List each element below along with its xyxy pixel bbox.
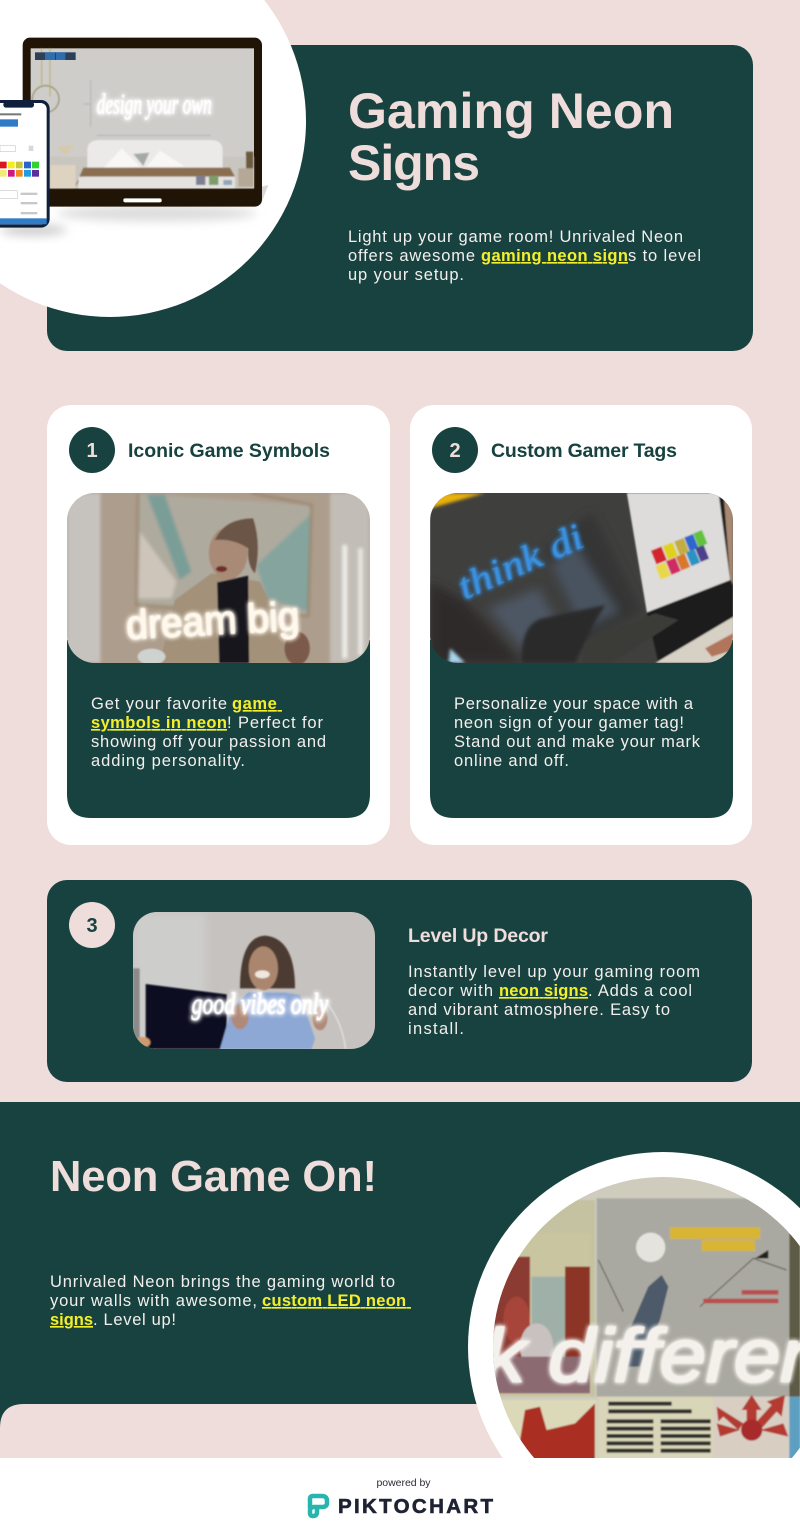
text block: level up decor: install.	[408, 1020, 464, 1038]
panel: header	[0, 0, 753, 351]
heading: Iconic Game Symbols: Iconic Game Symbols	[128, 440, 330, 462]
text block: card 1: game	[232, 695, 282, 713]
text block: footer: signs	[50, 1311, 93, 1329]
heading: title	[348, 83, 674, 191]
text block: header intro: up your setup.	[348, 266, 464, 284]
text block: card 1: Get your favorite	[91, 695, 227, 713]
badge: number 3: 3	[86, 915, 98, 937]
text block: header intro: gaming neon sign	[481, 247, 628, 265]
heading: title: Gaming Neon	[348, 83, 674, 139]
badge: number 2	[432, 427, 478, 473]
text block: card 2: neon sign of your gamer tag!	[454, 714, 684, 732]
pink strip at band bottom	[0, 1404, 800, 1458]
text block: level up decor: and vibrant atmosphere. Easy to	[408, 1001, 670, 1019]
text block: footer: . Level up!	[93, 1311, 176, 1329]
heading: Neon Game On!: Neon Game On!	[50, 1153, 377, 1201]
text block: level up decor	[408, 963, 700, 1038]
icon: Piktochart mark	[310, 1496, 327, 1516]
text block: header intro: s to level	[628, 247, 701, 265]
text block: level up decor: decor with	[408, 982, 493, 1000]
text block: card 1: symbols in neon	[91, 714, 227, 732]
phone	[0, 100, 50, 228]
image: laptop screen with blue neon design: think di	[451, 516, 590, 607]
panel: card 1	[47, 405, 390, 845]
badge: number 2: 2	[449, 440, 461, 462]
text block: card 2	[454, 695, 701, 770]
panel: card 2	[410, 405, 752, 845]
logo: Piktochart: PIKTOCHART	[338, 1495, 493, 1518]
text block: footer: Unrivaled Neon brings the gaming world to	[50, 1273, 395, 1291]
text block: card 1	[91, 695, 326, 770]
text block: footer	[50, 1273, 411, 1329]
text block: card 1: adding personality.	[91, 752, 245, 770]
panel: level up decor	[47, 880, 752, 1082]
image: woman holding dream big neon sign: dream big	[125, 593, 300, 648]
image: woman holding good vibes only neon sign: good vibes only	[192, 987, 329, 1020]
image: circular photo of posters with neon sign: k differen	[483, 1314, 800, 1398]
image: laptop screen with blue neon design	[430, 493, 734, 663]
panel: footer band	[0, 1102, 800, 1458]
text block: card 2: Personalize your space with a	[454, 695, 694, 713]
text block: header intro	[348, 228, 701, 284]
text block: header intro: offers awesome	[348, 247, 475, 265]
text: powered by: powered by	[376, 1477, 431, 1489]
heading: Level Up Decor: Level Up Decor	[408, 925, 548, 947]
heading: title: Signs	[348, 135, 480, 191]
text block: card 2: Stand out and make your mark	[454, 733, 701, 751]
image: laptop and phone mockup	[0, 38, 268, 240]
badge: number 3	[69, 902, 115, 948]
badge: number 1: 1	[86, 440, 98, 462]
text block: footer: custom LED neon	[262, 1292, 411, 1310]
white circle behind devices	[0, 0, 306, 317]
badge: number 1	[69, 427, 115, 473]
footer: white attribution strip	[0, 1458, 800, 1538]
image: woman holding good vibes only neon sign	[133, 912, 375, 1049]
text block: card 1: ! Perfect for	[227, 714, 324, 732]
text block: level up decor: Instantly level up your gaming room	[408, 963, 700, 981]
text block: card 1: showing off your passion and	[91, 733, 326, 751]
text block: footer: your walls with awesome,	[50, 1292, 257, 1310]
card 1 inner teal panel	[67, 640, 370, 818]
heading: Custom Gamer Tags: Custom Gamer Tags	[491, 440, 677, 462]
text block: level up decor: . Adds a cool	[588, 982, 692, 1000]
text block: header intro: Light up your game room! Unrivaled Neon	[348, 228, 683, 246]
card 2 inner teal panel	[430, 640, 733, 818]
text block: level up decor: neon signs	[499, 982, 588, 1000]
text block: card 2: online and off.	[454, 752, 569, 770]
image: circular photo of posters with neon sign	[468, 1152, 800, 1458]
image: woman holding dream big neon sign	[67, 493, 370, 665]
